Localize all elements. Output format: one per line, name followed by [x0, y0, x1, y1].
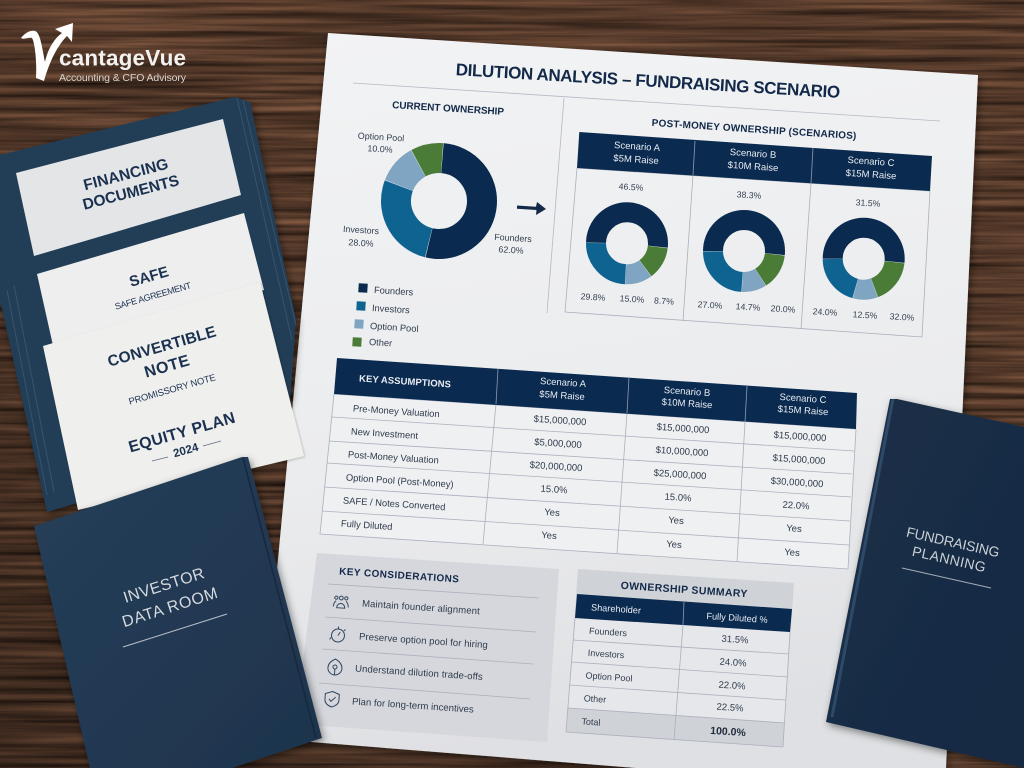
donut chart: current ownership — [381, 143, 497, 259]
summary rows: 31.5% — [721, 634, 749, 646]
scenario A donut and values: 29.8% — [580, 291, 606, 303]
scenario B donut and values: 14.7% — [735, 301, 761, 313]
scenario header band — [577, 132, 932, 191]
scenario B values: $15,000,000 — [656, 422, 710, 436]
item: maintain founder alignment — [333, 596, 480, 617]
table header: KEY ASSUMPTIONS — [359, 373, 451, 391]
icon: people — [333, 596, 349, 609]
row labels: SAFE / Notes Converted — [343, 495, 446, 512]
scenario C values: $30,000,000 — [770, 476, 824, 490]
table header: Scenario A — [540, 376, 587, 390]
book: fundraising planning: PLANNING — [911, 543, 987, 575]
donut labels: Option Pool — [358, 131, 404, 143]
scenario A donut and values — [580, 181, 674, 307]
heading: key considerations: KEY CONSIDERATIONS — [339, 567, 460, 585]
row labels: New Investment — [351, 426, 419, 441]
donut labels: Investors — [343, 224, 380, 236]
scenario header band: $5M Raise — [613, 153, 659, 167]
item: maintain founder alignment: Maintain founder alignment — [362, 599, 480, 617]
row labels: Pre-Money Valuation — [353, 403, 440, 419]
card: SAFE: SAFE AGREEMENT — [114, 280, 193, 312]
scenario B donut and values — [697, 189, 796, 315]
scenario C values: 22.0% — [782, 500, 810, 512]
donut labels — [343, 131, 533, 256]
row labels: Fully Diluted — [341, 518, 393, 532]
icon: shield check — [324, 691, 340, 707]
scenario B values: $25,000,000 — [653, 468, 707, 482]
item: understand dilution: Understand dilution trade-offs — [355, 664, 483, 683]
card: SAFE: SAFE — [127, 263, 171, 291]
summary rows: Other — [583, 693, 607, 705]
scenario B values: 15.0% — [664, 492, 692, 504]
item: understand dilution — [327, 659, 483, 683]
summary table header: Shareholder — [591, 602, 641, 616]
table header: Scenario C — [779, 392, 827, 406]
folder: financing documents stack — [0, 97, 304, 512]
card: convertible note and equity plan: 2024 — [172, 442, 201, 460]
scenario C values — [770, 430, 827, 559]
label: financing documents — [16, 119, 241, 256]
logo: VantageVue — [21, 23, 187, 84]
panel: current ownership — [343, 100, 533, 348]
scenario B values: Yes — [668, 515, 684, 527]
table header: $15M Raise — [777, 404, 829, 418]
scenario A values: $20,000,000 — [529, 460, 583, 474]
scenario A donut and values: 15.0% — [619, 293, 645, 305]
legend: Founders — [374, 285, 414, 297]
scenario B values — [653, 422, 710, 551]
scenario header band: $15M Raise — [845, 168, 897, 182]
legend: Other — [369, 337, 393, 348]
summary rows: 100.0% — [710, 725, 747, 739]
book: investor data room: DATA ROOM — [120, 585, 220, 631]
book: fundraising planning — [826, 399, 1024, 768]
row labels: Option Pool (Post-Money) — [346, 472, 454, 490]
item: plan for incentives: Plan for long-term incentives — [352, 697, 474, 716]
summary rows: Founders — [589, 626, 628, 638]
donut labels: 62.0% — [498, 244, 524, 256]
scenario A values: Yes — [544, 507, 560, 519]
icon: stopwatch — [330, 626, 346, 642]
summary table body — [568, 618, 790, 723]
table header: Scenario B — [663, 385, 711, 399]
item: preserve option pool — [330, 626, 488, 651]
donut labels: 10.0% — [367, 143, 393, 155]
scenario header band: $10M Raise — [727, 160, 779, 174]
scenario C values: Yes — [786, 523, 802, 535]
scenario A values: 15.0% — [540, 484, 568, 496]
scenario B donut and values: 20.0% — [770, 303, 796, 315]
scenario A values — [529, 414, 587, 542]
icon: V with arrow — [21, 23, 73, 81]
summary rows — [581, 626, 749, 739]
scenario C donut and values: 24.0% — [812, 306, 838, 318]
scenario A values: $15,000,000 — [533, 414, 587, 428]
scenario table frame — [565, 168, 930, 337]
table header — [334, 358, 857, 429]
donut labels: Founders — [494, 232, 533, 244]
donut labels: 28.0% — [348, 237, 374, 249]
scenario C donut and values: 31.5% — [855, 197, 881, 209]
scenario C donut and values: 12.5% — [852, 309, 878, 321]
summary rows: 22.5% — [716, 702, 744, 714]
label: financing documents: FINANCING — [82, 156, 170, 194]
summary rows: Option Pool — [585, 670, 633, 684]
scenario A values: Yes — [541, 530, 557, 542]
paper: dilution analysis sheet — [261, 33, 978, 768]
legend — [352, 283, 419, 348]
table header: $10M Raise — [661, 397, 713, 411]
scenario A donut and values: 46.5% — [618, 181, 644, 193]
scenario header band: Scenario B — [729, 147, 777, 161]
table header: $5M Raise — [539, 389, 585, 403]
heading: post-money ownership: POST-MONEY OWNERSHIP (SCENARIOS) — [651, 118, 857, 142]
card: convertible note and equity plan — [43, 282, 304, 510]
scenario B donut and values: 27.0% — [697, 299, 723, 311]
panel: ownership summary — [566, 569, 794, 747]
card: convertible note and equity plan: PROMISSORY NOTE — [127, 371, 217, 407]
book: fundraising planning: FUNDRAISING — [905, 524, 1001, 560]
sheet title: DILUTION ANALYSIS – FUNDRAISING SCENARIO — [455, 60, 841, 102]
scenario header band: Scenario A — [614, 140, 661, 154]
book: investor data room — [34, 457, 322, 768]
summary table header — [575, 594, 792, 632]
summary table header: Fully Diluted % — [706, 611, 768, 625]
scenario C values: $15,000,000 — [773, 430, 827, 444]
logo: VantageVue: Accounting & CFO Advisory — [59, 72, 187, 84]
scenario header band: Scenario C — [847, 155, 895, 169]
card: convertible note and equity plan: CONVERTIBLE — [106, 323, 218, 371]
table: key assumptions — [320, 358, 857, 569]
summary rows: Investors — [587, 648, 625, 660]
scenario B values: $10,000,000 — [655, 445, 709, 459]
scenario B donut and values: 38.3% — [736, 189, 762, 201]
row labels: Post-Money Valuation — [348, 449, 439, 466]
icon: tree in circle — [327, 659, 343, 675]
heading: ownership summary: OWNERSHIP SUMMARY — [620, 580, 748, 600]
legend: Option Pool — [370, 321, 419, 334]
scenario C values: $15,000,000 — [772, 453, 826, 467]
card: convertible note and equity plan: EQUITY PLAN — [127, 410, 237, 456]
arrow: current to post-money — [517, 202, 546, 215]
panel: post-money ownership scenarios — [565, 118, 932, 337]
scenario C donut and values: 32.0% — [889, 311, 915, 323]
summary rows: Total — [581, 716, 601, 728]
label: financing documents: DOCUMENTS — [81, 172, 181, 214]
item: preserve option pool: Preserve option pool for hiring — [359, 632, 488, 651]
item: plan for incentives — [324, 691, 474, 716]
scenario C donut and values — [812, 197, 915, 323]
scenario A values: $5,000,000 — [534, 437, 582, 451]
card: SAFE — [37, 213, 264, 350]
panel: key considerations — [295, 553, 559, 742]
card: convertible note and equity plan: NOTE — [143, 352, 192, 382]
scenario B values: Yes — [666, 539, 682, 551]
row labels — [341, 403, 454, 532]
book: investor data room: INVESTOR — [121, 565, 207, 607]
summary rows: 24.0% — [719, 657, 747, 669]
scenario C values: Yes — [784, 547, 800, 559]
summary rows: 22.0% — [718, 680, 746, 692]
scenario A donut and values: 8.7% — [654, 295, 674, 307]
legend: Investors — [372, 303, 410, 315]
heading: current ownership: CURRENT OWNERSHIP — [392, 100, 505, 118]
logo: VantageVue: cantageVue — [59, 46, 186, 70]
